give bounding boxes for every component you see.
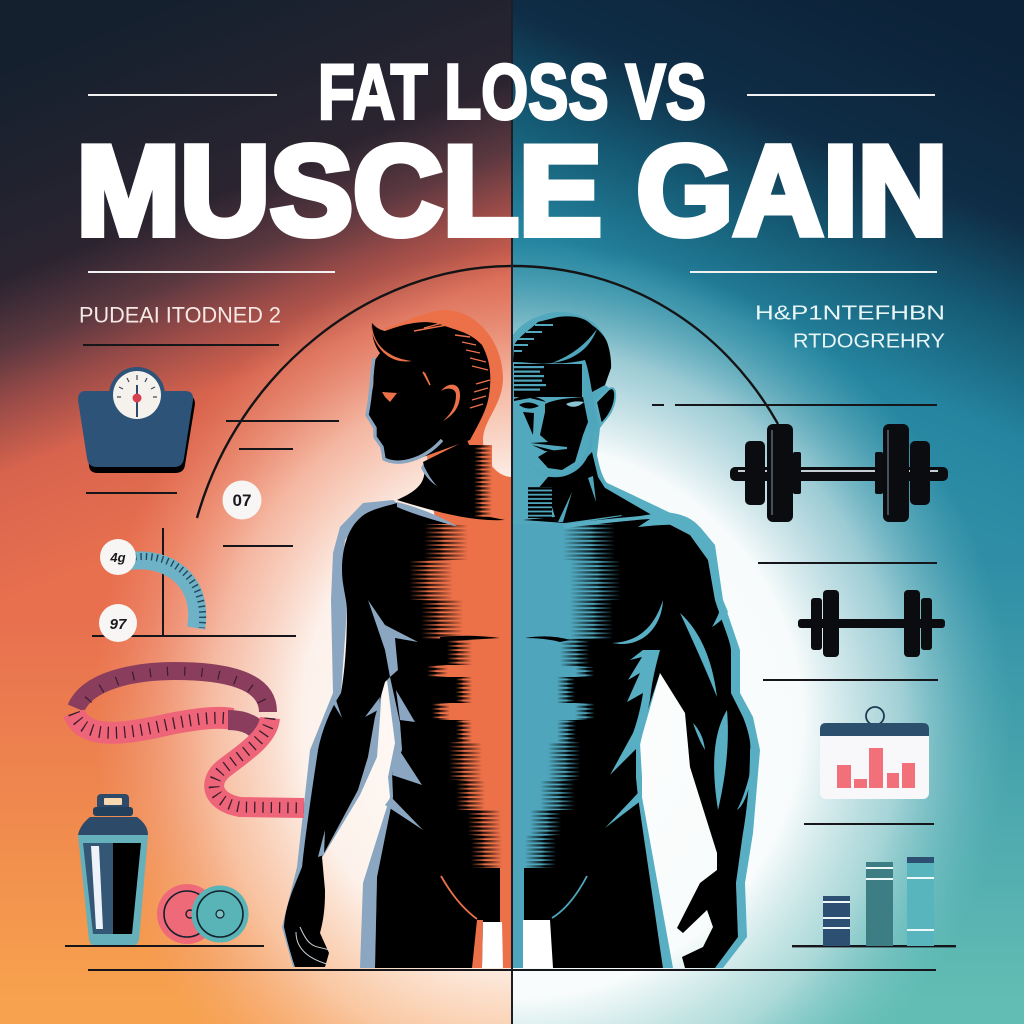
right chest top highlight [563, 512, 702, 530]
right arm outline [600, 483, 760, 968]
right thigh gap [523, 920, 553, 968]
bar chart: stacked columns [823, 857, 934, 946]
icon: small tape arc [130, 556, 203, 628]
icon: large tape measure [74, 671, 304, 808]
left hand detail [296, 927, 329, 964]
right subtitle: RTDOGREHRY [793, 330, 945, 352]
forehead shading [514, 364, 582, 397]
right torso stripes [513, 524, 620, 868]
left lower orange strip [500, 868, 512, 968]
head outline [367, 358, 442, 462]
nose and cheek black [530, 397, 588, 470]
figure: fat loss silhouette [282, 310, 512, 968]
right neck stripes [528, 487, 552, 518]
temple [583, 362, 598, 432]
hair highlight [372, 325, 412, 361]
eyes and cheek marks [514, 396, 584, 452]
icon: shaker bottle [78, 794, 148, 945]
badge: 97: 97 [110, 616, 127, 633]
left pec line [440, 636, 500, 641]
left brief [440, 868, 500, 921]
right neck and chest top [523, 452, 622, 523]
figure: muscle gain silhouette [512, 312, 760, 968]
right pec lower edge [612, 600, 663, 644]
icon: large dumbbell [730, 424, 948, 522]
rule lines [65, 344, 956, 971]
ear [441, 385, 460, 421]
jaw line [527, 428, 593, 477]
title [76, 48, 948, 262]
icon: calendar chart [820, 707, 929, 799]
forehead stripes [514, 366, 546, 391]
right brief [524, 869, 590, 920]
center divider [511, 0, 513, 1024]
left thigh gap [482, 922, 503, 968]
left chest highlight [397, 502, 458, 527]
left leg orange sliver [472, 920, 483, 968]
hair strands [414, 322, 490, 408]
background: right cool half [512, 0, 1024, 1024]
right body black [513, 485, 750, 968]
right hair [513, 316, 611, 392]
ear [596, 388, 615, 424]
left body black [284, 503, 512, 968]
left torso side outline [360, 677, 402, 968]
left neck stripes [462, 445, 492, 517]
right muscle highlights [605, 600, 755, 828]
hair stripes [514, 324, 553, 352]
background: left warm half [0, 0, 512, 1024]
icon: weight scale [78, 367, 195, 473]
parting line [552, 329, 597, 363]
right subtitle [755, 302, 945, 352]
badge: 07 [222, 480, 262, 520]
left brief trim [441, 876, 477, 919]
right pec line [525, 636, 570, 642]
badge: 07: 07 [233, 491, 251, 510]
icon: small dumbbell [798, 590, 945, 657]
left muscle highlights [318, 600, 423, 857]
title line 1: FAT LOSS VS [318, 48, 706, 136]
right brief trim [552, 876, 587, 918]
left neck and chest top [397, 440, 505, 520]
right head and neck base [512, 312, 660, 532]
badge: 97 [99, 604, 137, 642]
right subtitle: H&P1NTEFHBN [755, 302, 945, 324]
left torso stripes [410, 524, 511, 868]
cheek mark [423, 372, 430, 385]
badge: 4g: 4g [109, 550, 126, 565]
left arm outline [282, 500, 397, 967]
badge: 4g [100, 539, 136, 575]
left subtitle: PUDEAI ITODNED 2 [79, 302, 281, 328]
eye [382, 392, 397, 402]
right neck highlights [558, 476, 596, 522]
right lower blue strip [513, 868, 524, 968]
head black [367, 322, 490, 463]
icon: weight plates [157, 884, 248, 944]
right leg outline [634, 673, 673, 968]
head: right front [513, 316, 615, 477]
title line 2: MUSCLE GAIN [76, 120, 948, 262]
left inner arm outline [322, 694, 382, 857]
title rules [88, 94, 937, 273]
left hair and back glow [385, 310, 511, 524]
head: left profile [367, 322, 490, 463]
arc across figures [197, 266, 778, 518]
left neck tendon [421, 464, 437, 486]
